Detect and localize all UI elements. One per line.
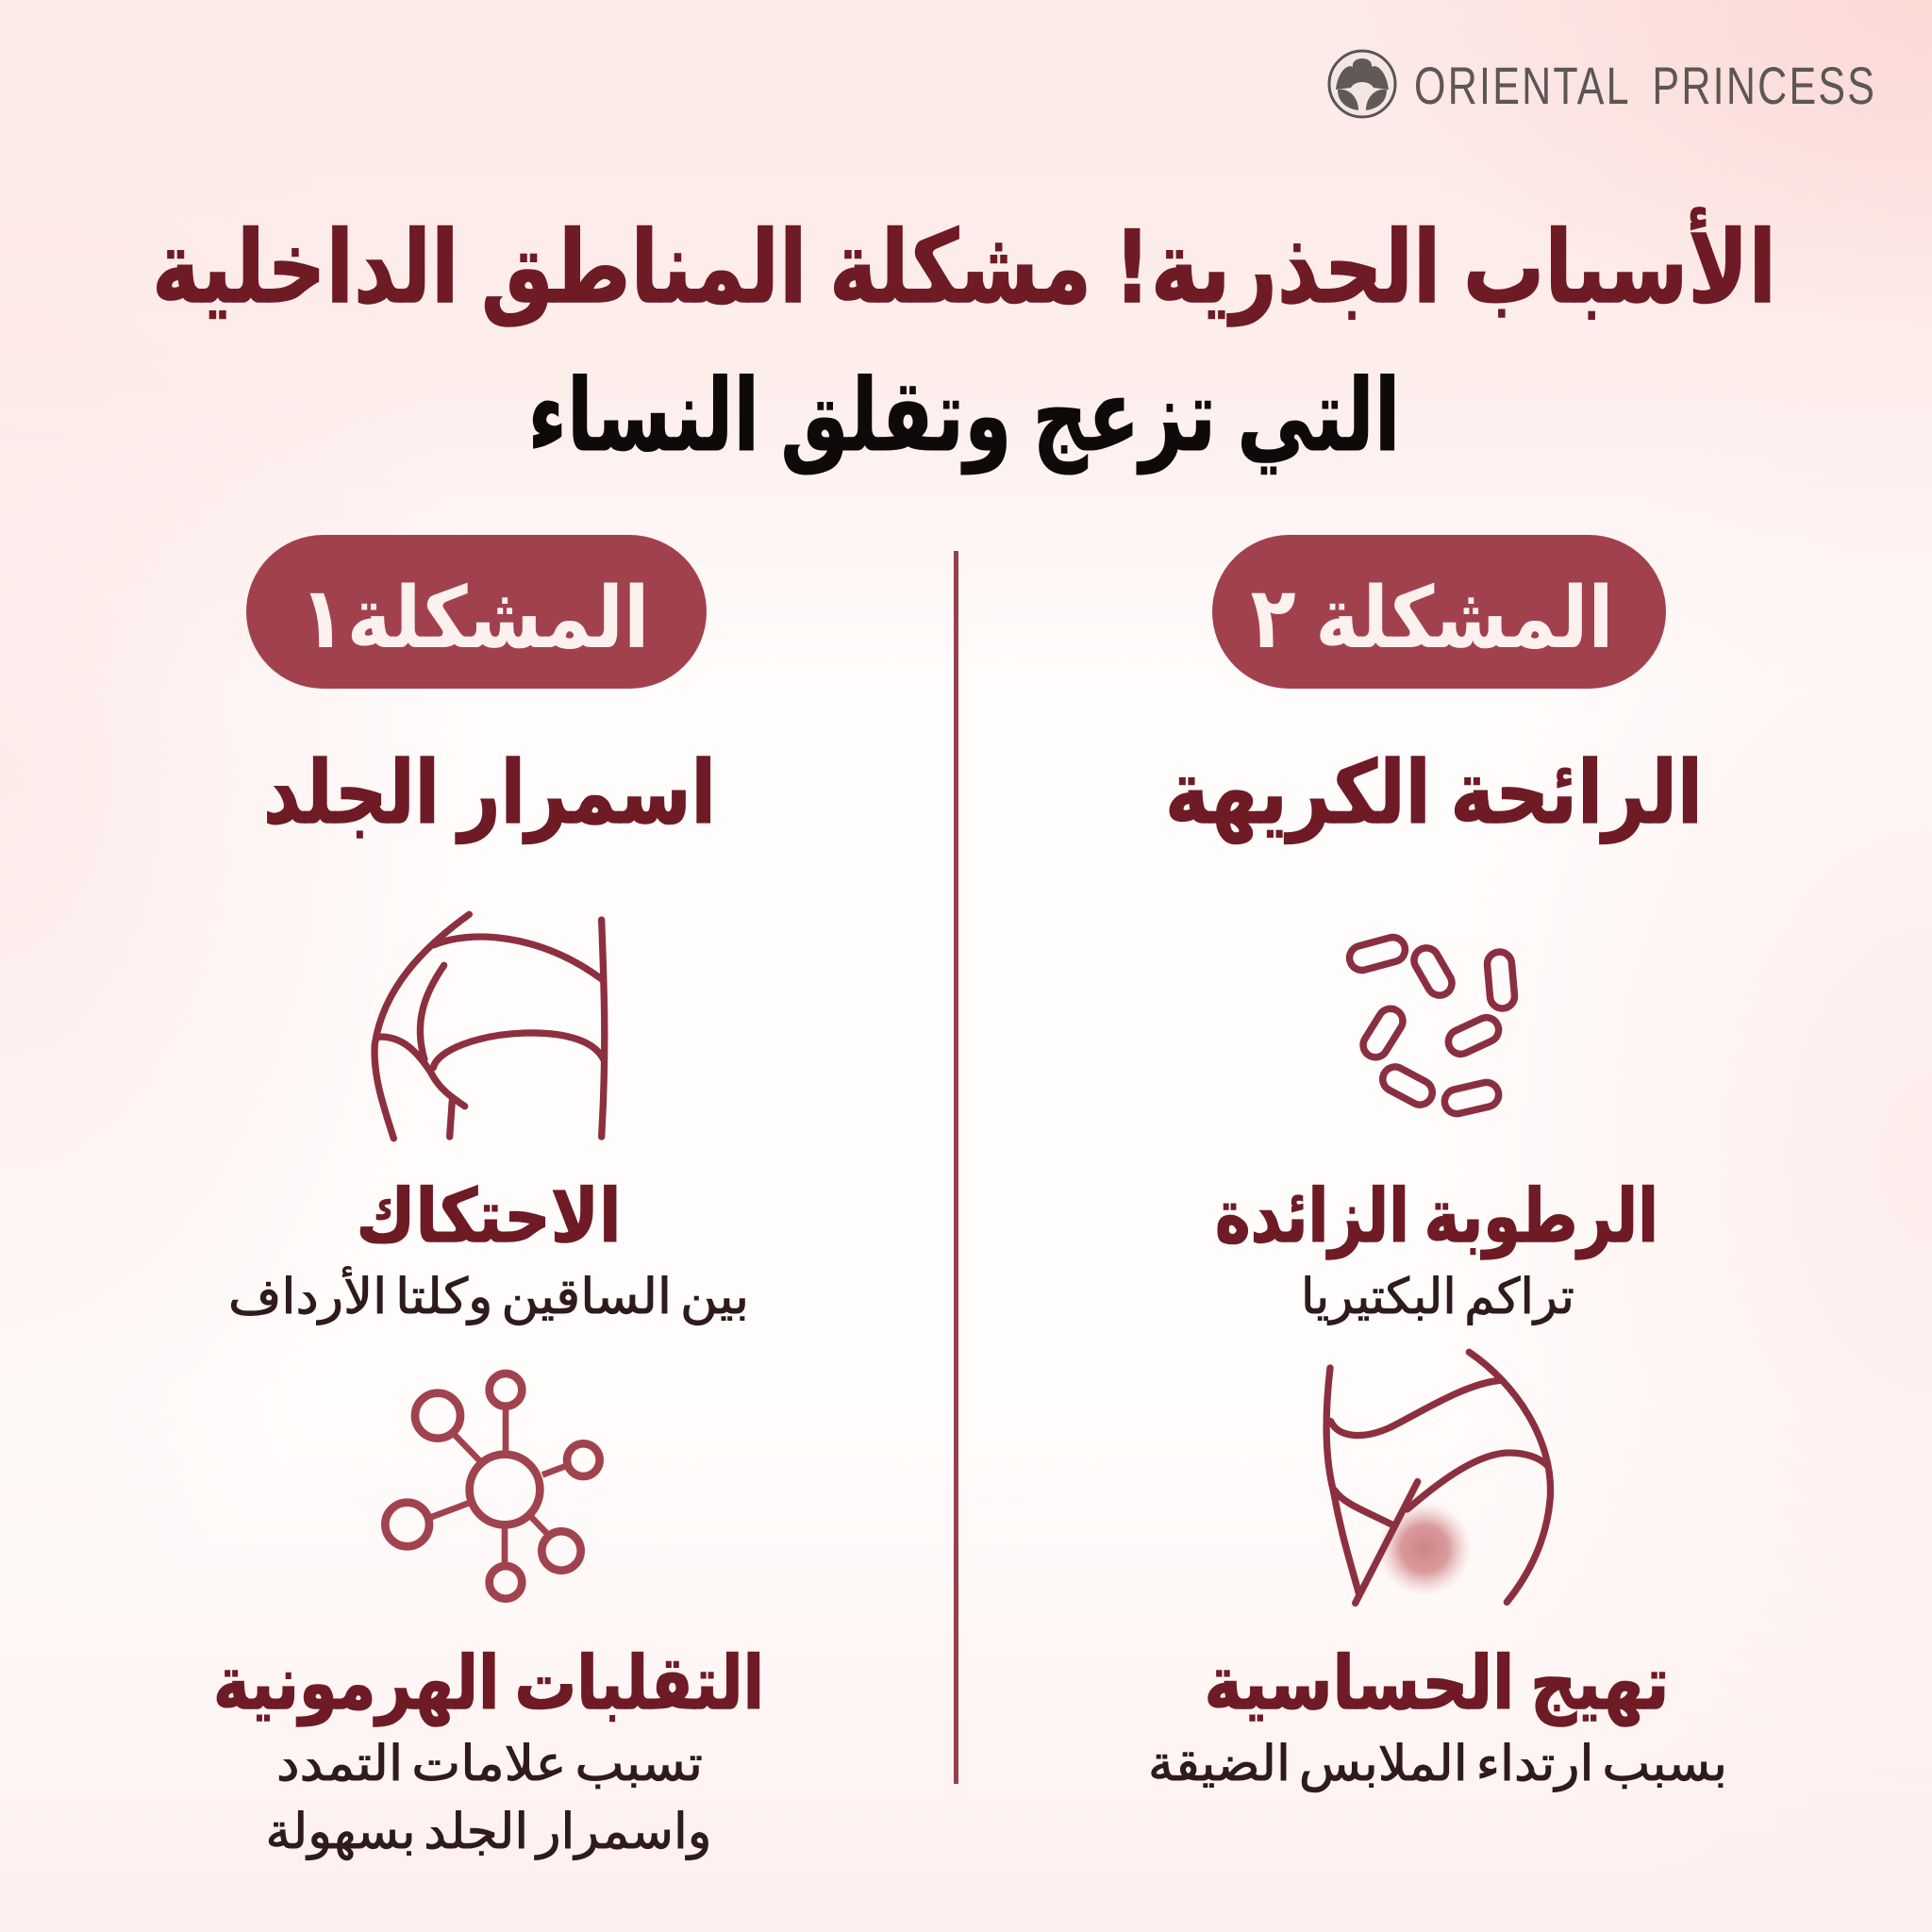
text: hormonal detail line 2: واسمرار الجلد بسهولة	[266, 1804, 711, 1860]
panel: problem 2	[1148, 535, 1727, 1792]
logo: Oriental Princess	[1329, 51, 1874, 117]
logo wordmark: ORIENTAL PRINCESS	[1414, 57, 1874, 115]
text: moisture detail: تراكم البكتيريا	[1301, 1269, 1574, 1325]
icon: hormone network	[385, 1374, 600, 1599]
subtitle: التي تزعج وتقلق النساء	[528, 358, 1400, 475]
icon: irritated skin	[1326, 1352, 1551, 1603]
outline	[1326, 1352, 1551, 1603]
icon: thigh friction	[375, 914, 605, 1139]
badge: problem 2: المشكلة ٢	[1251, 569, 1613, 668]
text: friction detail: بين الساقين وكلتا الأرداف	[228, 1266, 749, 1325]
subheading: hormonal changes: التقلبات الهرمونية	[213, 1641, 764, 1726]
badge: problem 2	[1212, 535, 1666, 689]
heading: skin darkening: اسمرار الجلد	[263, 742, 716, 844]
badge: problem 1: المشكلة ١	[300, 569, 649, 668]
badge: problem 1	[246, 535, 707, 689]
divider	[954, 551, 958, 1784]
icon: bacteria	[1347, 935, 1516, 1116]
icon: flower emblem	[1329, 51, 1395, 117]
text: hormonal detail line 1: تسبب علامات التمدد	[276, 1736, 703, 1792]
subheading: irritation: تهيج الحساسية	[1204, 1641, 1670, 1726]
subheading: friction: الاحتكاك	[357, 1174, 621, 1259]
panel: problem 1	[213, 535, 764, 1860]
heading: unpleasant odor: الرائحة الكريهة	[1165, 742, 1703, 844]
text: irritation detail: بسبب ارتداء الملابس الضيقة	[1148, 1736, 1727, 1792]
irritation spot	[1377, 1502, 1472, 1596]
subheading: excess moisture: الرطوبة الزائدة	[1215, 1174, 1658, 1259]
